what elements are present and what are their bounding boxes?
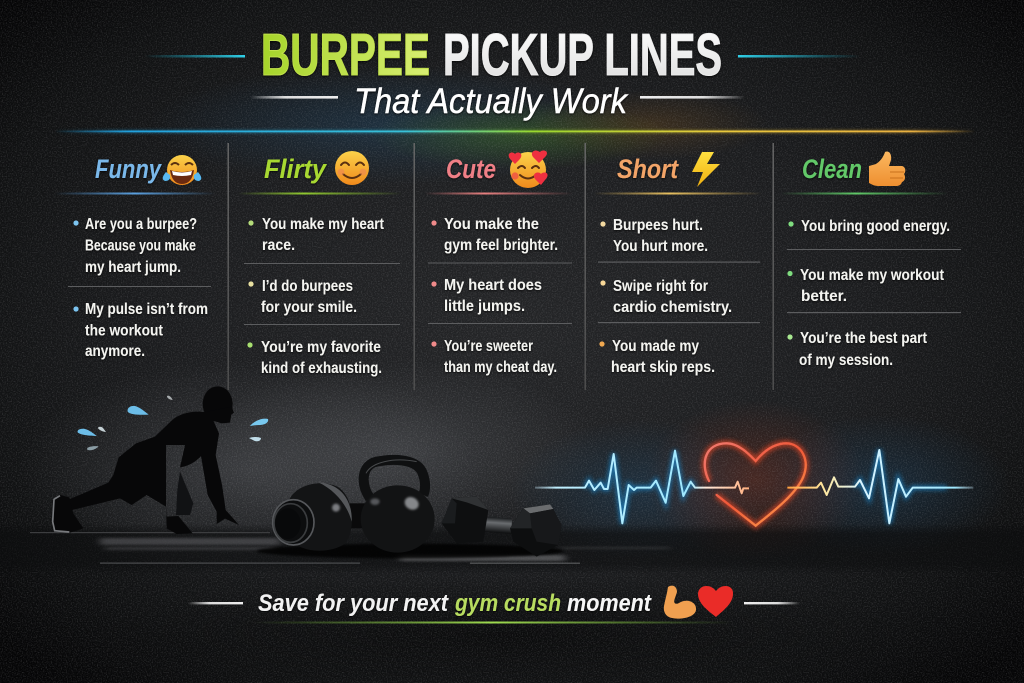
joke: skip reps: You made my	[612, 338, 699, 355]
panel: short	[594, 152, 762, 376]
pulse line right	[787, 450, 973, 523]
heading: Clean: Clean	[802, 154, 862, 184]
joke: cheat day	[431, 338, 557, 376]
joke: swipe: cardio chemistry.	[613, 299, 732, 316]
pulse line left	[535, 451, 749, 523]
heartbeat and neon heart	[535, 443, 973, 526]
panel: funny	[55, 154, 215, 360]
heading underline	[425, 192, 573, 194]
icon: red heart	[698, 586, 733, 617]
joke: smile: I’d do burpees	[262, 278, 353, 295]
footer accent lines	[188, 602, 800, 604]
joke: cheat day: than my cheat day.	[444, 359, 557, 376]
joke: workout: better.	[801, 288, 847, 305]
footer text: gym crush: gym crush	[454, 590, 561, 617]
heading: Pickup Lines: PICKUP LINES	[443, 22, 722, 88]
joke: exhausting: kind of exhausting.	[261, 360, 382, 377]
joke: cheat day: You’re sweeter	[444, 338, 533, 355]
joke: burpee: Because you make	[85, 238, 196, 254]
heading: Funny: Funny	[95, 154, 163, 184]
panel: cute	[425, 150, 573, 376]
heading: Short: Short	[617, 154, 679, 184]
joke: brighter	[431, 216, 558, 254]
heading underline	[55, 192, 215, 194]
joke: hurt: You hurt more.	[613, 238, 708, 255]
joke: little jumps: My heart does	[444, 277, 542, 294]
joke: little jumps: little jumps.	[444, 298, 525, 315]
heading underline	[594, 192, 762, 194]
kettlebell upright	[361, 485, 435, 553]
subtitle: That Actually Work	[354, 82, 628, 121]
column dividers	[228, 143, 774, 390]
joke: swipe: Swipe right for	[613, 278, 708, 295]
joke: workout: You make my workout	[800, 267, 944, 284]
joke: brighter: gym feel brighter.	[444, 237, 558, 254]
joke: hurt	[600, 217, 708, 255]
icon: laughing emoji	[163, 155, 201, 185]
footer text: save: Save for your next	[258, 590, 449, 617]
joke: heart race: You make my heart	[262, 216, 384, 233]
heading: Burpee: BURPEE	[261, 22, 430, 88]
joke: pulse: My pulse isn’t from	[85, 301, 208, 318]
joke: pulse: anymore.	[85, 343, 145, 360]
joke: session	[787, 330, 927, 369]
icon: thumbs up	[869, 151, 905, 186]
joke: exhausting: You’re my favorite	[261, 339, 381, 356]
heart outline	[705, 443, 806, 526]
joke: exhausting	[247, 339, 382, 377]
heading underline	[238, 192, 402, 194]
joke: little jumps	[431, 277, 542, 315]
illustration: athlete	[52, 386, 268, 534]
neon glow	[585, 443, 947, 526]
title accent lines	[145, 55, 860, 58]
sweat drops	[78, 396, 268, 450]
rainbow divider	[55, 130, 975, 134]
footer underline	[254, 622, 733, 624]
joke: energy: You bring good energy.	[801, 218, 950, 235]
heading: Cute: Cute	[446, 154, 496, 184]
joke: pulse: the workout	[85, 322, 163, 340]
joke: hurt: Burpees hurt.	[613, 217, 703, 234]
joke: skip reps: heart skip reps.	[611, 359, 715, 376]
dumbbell	[442, 497, 562, 557]
joke: session: You’re the best part	[800, 330, 927, 347]
joke: brighter: You make the	[444, 216, 539, 233]
illustration: kettlebells and dumbbell	[257, 460, 563, 558]
silhouette	[52, 386, 239, 534]
joke: heart race: race.	[262, 237, 295, 254]
panel: flirty	[238, 151, 402, 377]
icon: lightning bolt	[692, 152, 720, 187]
footer text: moment: moment	[567, 590, 652, 617]
joke: skip reps	[599, 338, 715, 376]
joke: smile	[248, 278, 357, 316]
joke: workout	[787, 267, 944, 305]
panel: clean	[781, 151, 961, 369]
kettlebell on side	[272, 482, 352, 551]
gym floor	[0, 524, 1024, 574]
footer callout	[188, 586, 800, 624]
joke: swipe	[600, 278, 732, 316]
heading underline	[781, 192, 948, 194]
joke: heart race	[248, 216, 384, 254]
icon: smiling emoji	[335, 151, 369, 185]
title	[145, 22, 860, 121]
joke: session: of my session.	[799, 352, 893, 369]
joke: burpee	[73, 216, 197, 276]
joke: pulse	[73, 301, 208, 360]
joke: burpee: my heart jump.	[85, 259, 181, 276]
icon: flexed arm	[664, 586, 696, 619]
kettlebell handle	[364, 460, 425, 498]
subtitle accent lines	[250, 96, 745, 99]
joke: burpee: Are you a burpee?	[85, 216, 197, 233]
heading: Flirty: Flirty	[264, 154, 328, 184]
joke: smile: for your smile.	[261, 299, 357, 316]
icon: hearts emoji	[509, 150, 548, 188]
